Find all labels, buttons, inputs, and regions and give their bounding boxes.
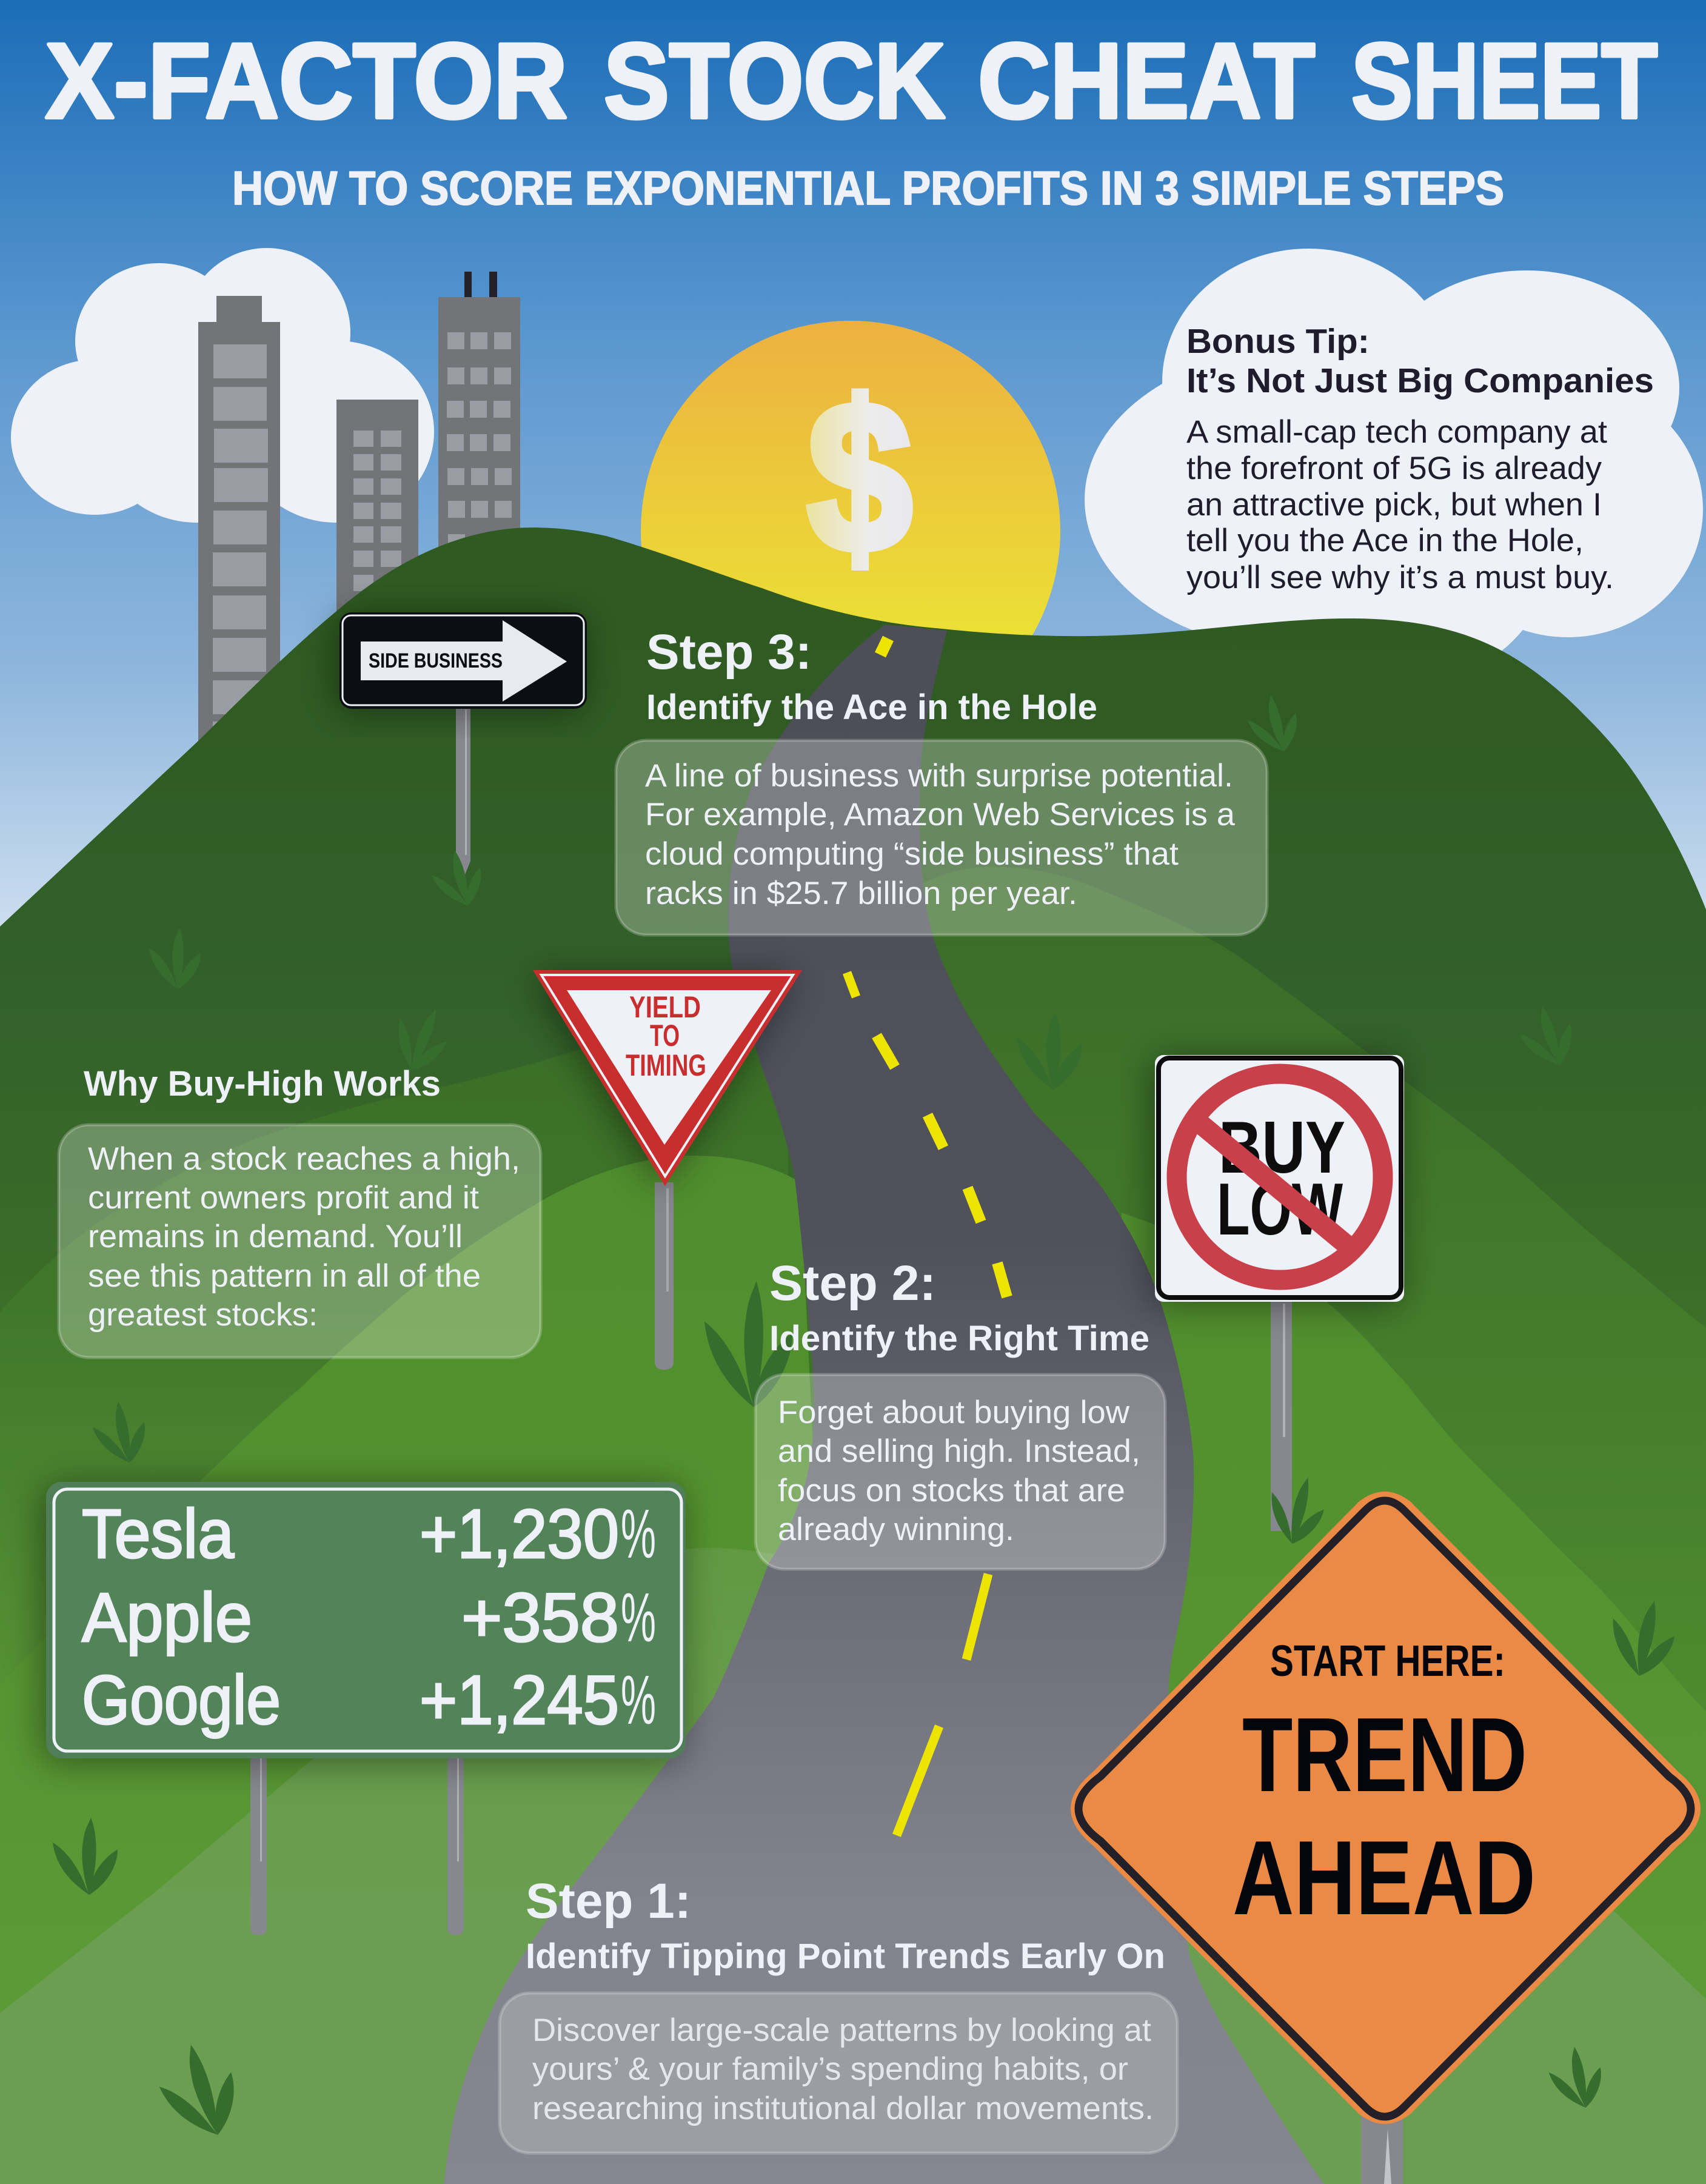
diamond board bbox=[1071, 1492, 1701, 2124]
bonus body: you’ll see why it’s a must buy. bbox=[1186, 560, 1614, 595]
percent signs bbox=[621, 1496, 656, 1739]
sun bbox=[641, 321, 1060, 740]
bonus body bbox=[1186, 414, 1614, 595]
step 3 panel: racks in $25.7 billion per year. bbox=[645, 876, 1077, 911]
sign board bbox=[340, 612, 587, 709]
why panel bbox=[59, 1125, 541, 1358]
bonus body: A small-cap tech company at bbox=[1186, 414, 1607, 450]
percent signs: % bbox=[621, 1662, 656, 1739]
step 2 bbox=[755, 1256, 1165, 1569]
light hill left bbox=[0, 1156, 849, 2184]
title: X-FACTOR bbox=[45, 22, 567, 141]
sign board: TO bbox=[650, 1019, 680, 1053]
sign text bbox=[1233, 1637, 1536, 1937]
why heading: Why Buy-High Works bbox=[84, 1064, 441, 1104]
title: SHEET bbox=[1351, 22, 1657, 141]
why panel: see this pattern in all of the bbox=[88, 1258, 481, 1294]
step 1 panel: yours’ & your family’s spending habits, or bbox=[532, 2051, 1128, 2087]
sign post bbox=[456, 708, 470, 879]
title bbox=[45, 22, 1657, 141]
title: STOCK bbox=[604, 22, 945, 141]
why panel: greatest stocks: bbox=[88, 1297, 318, 1333]
bonus tip cloud bbox=[1085, 249, 1703, 679]
sign text: START HERE: bbox=[1270, 1637, 1505, 1686]
sign posts bbox=[250, 1755, 464, 1935]
stock rows: Apple bbox=[82, 1579, 252, 1656]
why panel: current owners profit and it bbox=[88, 1180, 479, 1216]
bonus body: an attractive pick, but when I bbox=[1186, 487, 1602, 523]
grass tuft over side business post bbox=[427, 845, 489, 913]
sign post bbox=[655, 1182, 674, 1370]
title: CHEAT bbox=[978, 22, 1315, 141]
step 1 subheading: Identify Tipping Point Trends Early On bbox=[526, 1937, 1165, 1976]
step 2 subheading: Identify the Right Time bbox=[769, 1319, 1149, 1358]
buildings bbox=[198, 272, 520, 824]
sign board bbox=[1155, 1055, 1404, 1302]
why buy-high works bbox=[59, 1064, 541, 1358]
step 1 heading: Step 1: bbox=[526, 1874, 691, 1929]
stock rows: +1,245 bbox=[420, 1662, 619, 1739]
sign: trend ahead bbox=[1071, 1492, 1701, 2184]
subtitle: HOW TO SCORE EXPONENTIAL PROFITS IN 3 SIMPLE STEPS bbox=[232, 161, 1504, 215]
step 2 heading: Step 2: bbox=[769, 1256, 936, 1311]
grass tufts bbox=[53, 690, 1680, 2148]
mid hill right bbox=[849, 867, 1706, 2184]
step 3 heading: Step 3: bbox=[646, 625, 812, 680]
bonus tip text bbox=[1186, 322, 1654, 595]
step 3 subheading: Identify the Ace in the Hole bbox=[646, 688, 1097, 727]
step 3 panel bbox=[616, 740, 1267, 935]
sign board bbox=[46, 1482, 686, 1758]
step 2 panel: Forget about buying low bbox=[778, 1395, 1130, 1430]
step 2 panel: already winning. bbox=[778, 1512, 1014, 1547]
why panel: remains in demand. You’ll bbox=[88, 1219, 463, 1254]
percent signs: % bbox=[621, 1496, 656, 1573]
sign board: LOW bbox=[1217, 1168, 1343, 1250]
step 1 bbox=[500, 1874, 1177, 2153]
sign board: YIELD bbox=[629, 990, 701, 1024]
step 2 panel bbox=[755, 1375, 1165, 1569]
building: middle bbox=[336, 400, 418, 824]
building: right with antennas bbox=[438, 272, 520, 661]
sign text: TREND bbox=[1242, 1695, 1527, 1814]
bonus heading: Bonus Tip: bbox=[1186, 322, 1370, 361]
step 2 panel: and selling high. Instead, bbox=[778, 1433, 1140, 1469]
step 3 bbox=[616, 625, 1267, 935]
sign: yield to timing bbox=[533, 970, 802, 1370]
bonus heading bbox=[1186, 322, 1654, 400]
sign: stock returns highway sign bbox=[46, 1482, 686, 1935]
back hill bbox=[0, 528, 1706, 2184]
sign post bbox=[1271, 1298, 1292, 1531]
sky background bbox=[0, 0, 1706, 970]
step 3 panel: cloud computing “side business” that bbox=[645, 836, 1179, 872]
bonus body: the forefront of 5G is already bbox=[1186, 451, 1602, 486]
sign board: BUY bbox=[1219, 1106, 1345, 1188]
front hill bbox=[0, 1548, 1706, 2184]
mid hill left bbox=[0, 994, 788, 2184]
sign board: TIMING bbox=[626, 1048, 706, 1082]
stock rows: +358 bbox=[461, 1579, 619, 1656]
step 1 panel bbox=[500, 1993, 1177, 2153]
percent signs: % bbox=[621, 1579, 656, 1656]
stock rows: Tesla bbox=[82, 1496, 235, 1573]
step 2 panel: focus on stocks that are bbox=[778, 1473, 1125, 1509]
light hill right bbox=[1122, 1213, 1706, 2184]
icon: dollar sign: $ bbox=[808, 358, 912, 596]
sign board bbox=[533, 970, 802, 1186]
sign post bbox=[1361, 2116, 1403, 2184]
grass tuft over buy low post bbox=[1262, 1471, 1330, 1549]
why panel: When a stock reaches a high, bbox=[88, 1141, 520, 1177]
step 3 panel: For example, Amazon Web Services is a bbox=[645, 797, 1236, 832]
left cloud bbox=[11, 248, 434, 523]
bonus body: tell you the Ace in the Hole, bbox=[1186, 523, 1584, 558]
stock rows: Google bbox=[82, 1662, 281, 1739]
sign: side business bbox=[340, 612, 587, 879]
sign text: AHEAD bbox=[1233, 1818, 1536, 1937]
road center dashes bbox=[847, 638, 1007, 1835]
step 1 panel: researching institutional dollar movements. bbox=[532, 2091, 1154, 2126]
sign: buy low bbox=[1155, 1055, 1404, 1531]
stock rows: +1,230 bbox=[420, 1496, 619, 1573]
bonus heading: It’s Not Just Big Companies bbox=[1186, 361, 1654, 400]
step 1 panel: Discover large-scale patterns by looking at bbox=[532, 2012, 1151, 2048]
road bbox=[444, 625, 1324, 2184]
sign board: SIDE BUSINESS bbox=[369, 649, 503, 672]
building: tall left bbox=[198, 296, 280, 807]
stock rows bbox=[82, 1496, 619, 1739]
step 3 panel: A line of business with surprise potential. bbox=[645, 758, 1233, 794]
